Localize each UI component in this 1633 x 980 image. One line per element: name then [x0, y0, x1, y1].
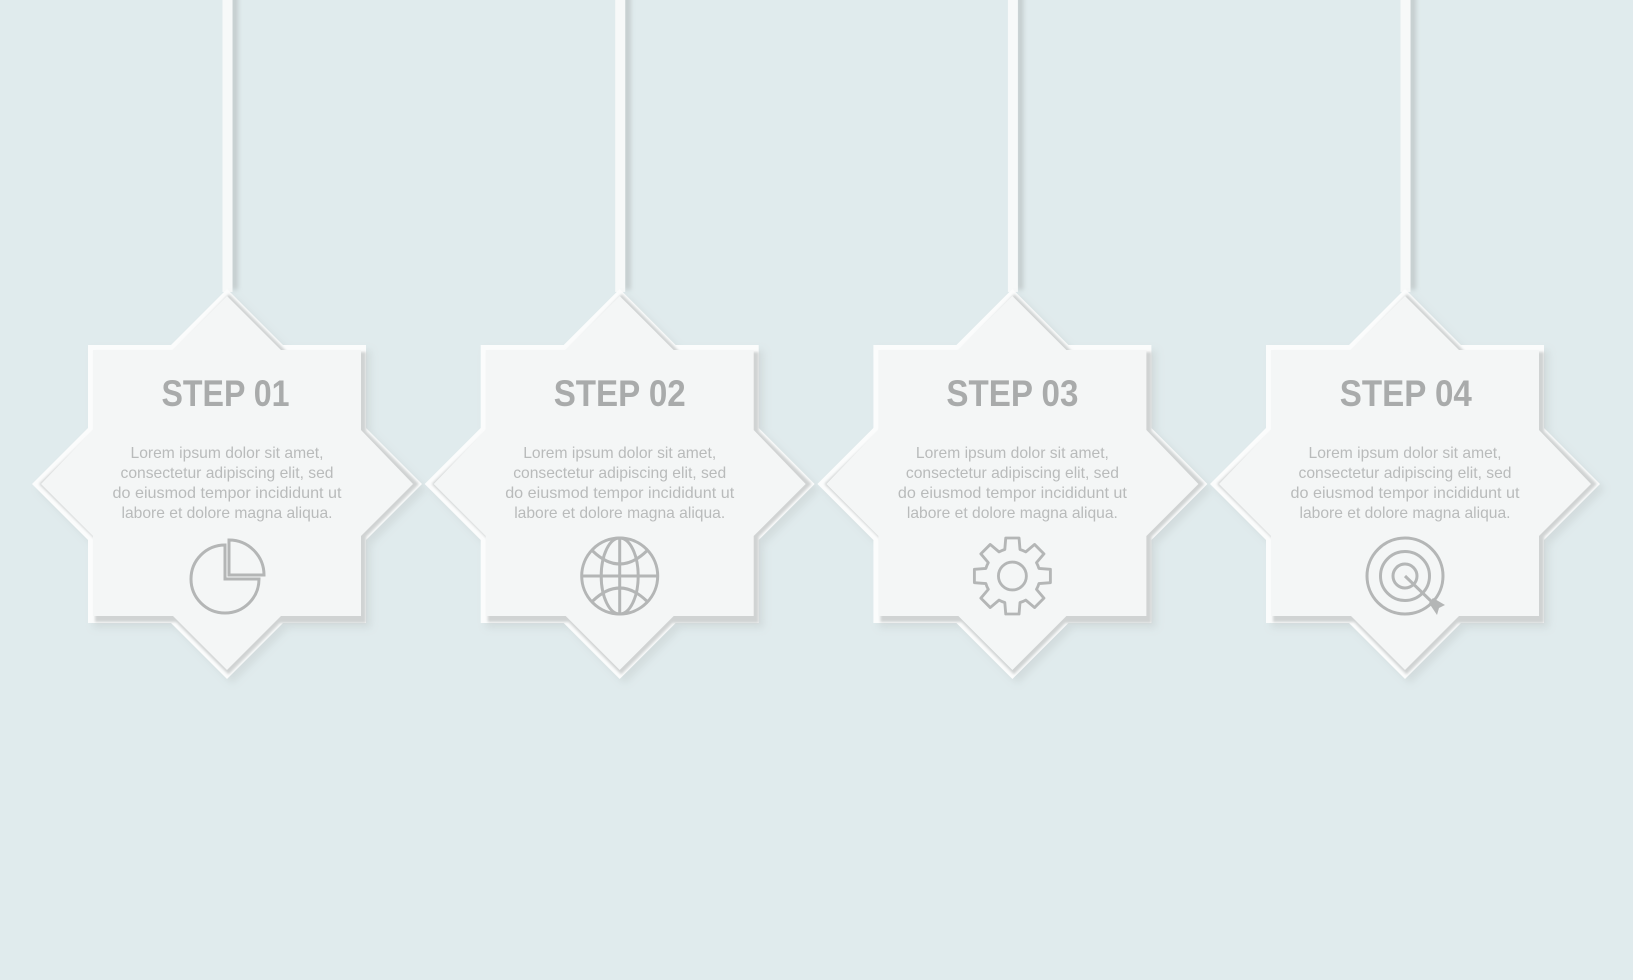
text block: step 04 description: labore et dolore magna aliqua. — [1300, 505, 1510, 522]
text block: step 02 description: do eiusmod tempor incididunt ut — [505, 485, 735, 502]
icon: gear — [974, 538, 1050, 614]
heading: step 04: STEP 04 — [1340, 373, 1472, 414]
text block: step 01 description: Lorem ipsum dolor sit amet, — [130, 445, 324, 462]
text block: step 03 description: do eiusmod tempor incididunt ut — [898, 485, 1127, 502]
heading: step 03: STEP 03 — [946, 373, 1078, 414]
text block: step 03 description — [898, 445, 1127, 522]
panel: step 02 star card — [425, 289, 820, 684]
icon: globe — [582, 538, 658, 614]
text block: step 03 description: consectetur adipiscing elit, sed — [906, 465, 1119, 482]
hanging strip 1 — [222, 0, 238, 292]
text block: step 04 description: Lorem ipsum dolor sit amet, — [1308, 445, 1502, 462]
hanging strip 3 — [1008, 0, 1023, 292]
text block: step 01 description: do eiusmod tempor incididunt ut — [112, 485, 342, 502]
text block: step 03 description: Lorem ipsum dolor sit amet, — [916, 445, 1109, 462]
icon: target with arrow — [1367, 538, 1445, 615]
text block: step 03 description: labore et dolore magna aliqua. — [907, 505, 1118, 522]
panel: step 04 star card — [1210, 289, 1605, 684]
text block: step 04 description: do eiusmod tempor incididunt ut — [1290, 485, 1520, 502]
text block: step 02 description: Lorem ipsum dolor sit amet, — [523, 445, 716, 462]
heading: step 01: STEP 01 — [162, 373, 290, 414]
text block: step 01 description — [112, 445, 342, 522]
heading: step 02: STEP 02 — [554, 373, 686, 414]
text block: step 02 description: labore et dolore magna aliqua. — [514, 505, 725, 522]
text block: step 01 description: labore et dolore magna aliqua. — [122, 505, 332, 522]
text block: step 01 description: consectetur adipiscing elit, sed — [120, 465, 334, 482]
icon: pie chart — [191, 540, 264, 613]
panel: step 01 star card — [32, 289, 427, 684]
text block: step 04 description — [1290, 445, 1520, 522]
text block: step 02 description: consectetur adipiscing elit, sed — [513, 465, 726, 482]
panel: step 03 star card — [817, 289, 1212, 684]
text block: step 04 description: consectetur adipiscing elit, sed — [1298, 465, 1512, 482]
hanging strip 4 — [1400, 0, 1416, 292]
text block: step 02 description — [505, 445, 735, 522]
hanging strip 2 — [615, 0, 631, 292]
